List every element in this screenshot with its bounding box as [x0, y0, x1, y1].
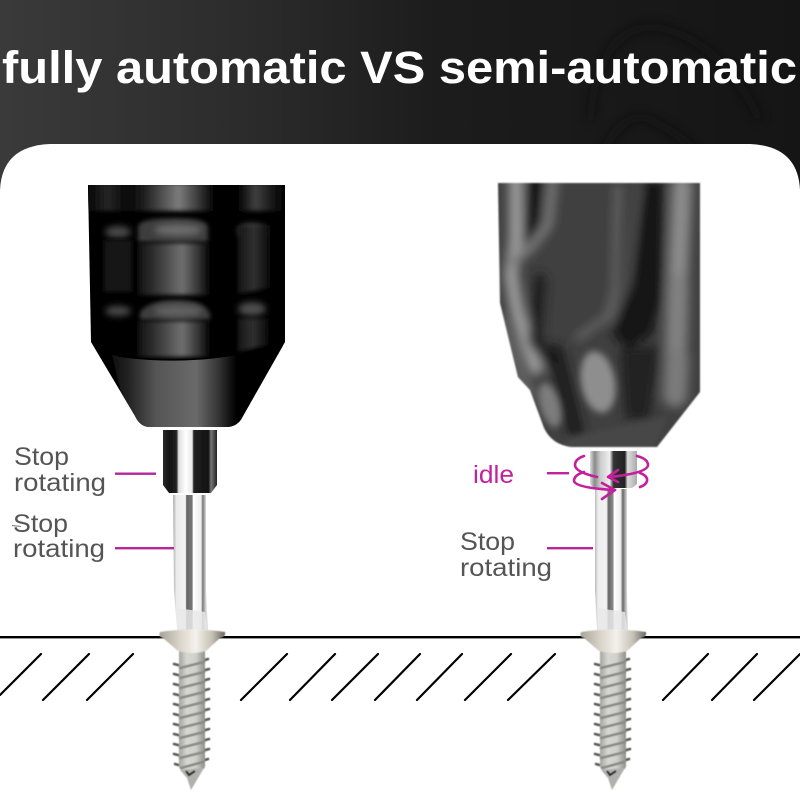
fully automatic driver — [80, 180, 290, 630]
driver body: fully automatic — [88, 185, 285, 427]
collet: fully automatic — [163, 430, 217, 493]
header background — [0, 0, 800, 200]
title: fully automatic VS semi-automatic — [2, 42, 797, 93]
label: Stop rotating, shaft right: rotating — [460, 554, 552, 582]
label: idle: idle — [473, 461, 514, 489]
label: Stop rotating, shaft right — [460, 528, 552, 582]
bit tip: fully automatic — [177, 608, 207, 630]
label: Stop rotating, collet left — [14, 443, 106, 497]
semi-automatic driver — [490, 178, 705, 630]
driver body: semi-automatic — [490, 178, 705, 453]
bit shaft: fully automatic — [173, 495, 208, 630]
label: Stop rotating, collet left: Stop — [14, 443, 69, 471]
label: Stop rotating, shaft left: rotating — [13, 535, 105, 563]
label: Stop rotating, shaft left: Stop — [13, 510, 68, 538]
rotation arrows: idle collet — [574, 456, 648, 499]
ground line and hatching — [0, 636, 800, 700]
screw: fully automatic — [159, 630, 225, 790]
bit shaft: semi-automatic — [595, 489, 628, 630]
bit tip: semi-automatic — [597, 608, 627, 630]
label: Stop rotating, shaft right: Stop — [460, 528, 515, 556]
leader line: collet left — [115, 472, 156, 475]
screw: semi-automatic — [580, 630, 646, 790]
collet: semi-automatic — [590, 451, 637, 488]
leader line: shaft right — [547, 547, 593, 549]
label: Stop rotating, collet left: rotating — [14, 469, 106, 497]
leader line: shaft left — [115, 547, 174, 549]
leader line: idle — [547, 472, 569, 474]
label: Stop rotating, shaft left — [12, 510, 105, 563]
